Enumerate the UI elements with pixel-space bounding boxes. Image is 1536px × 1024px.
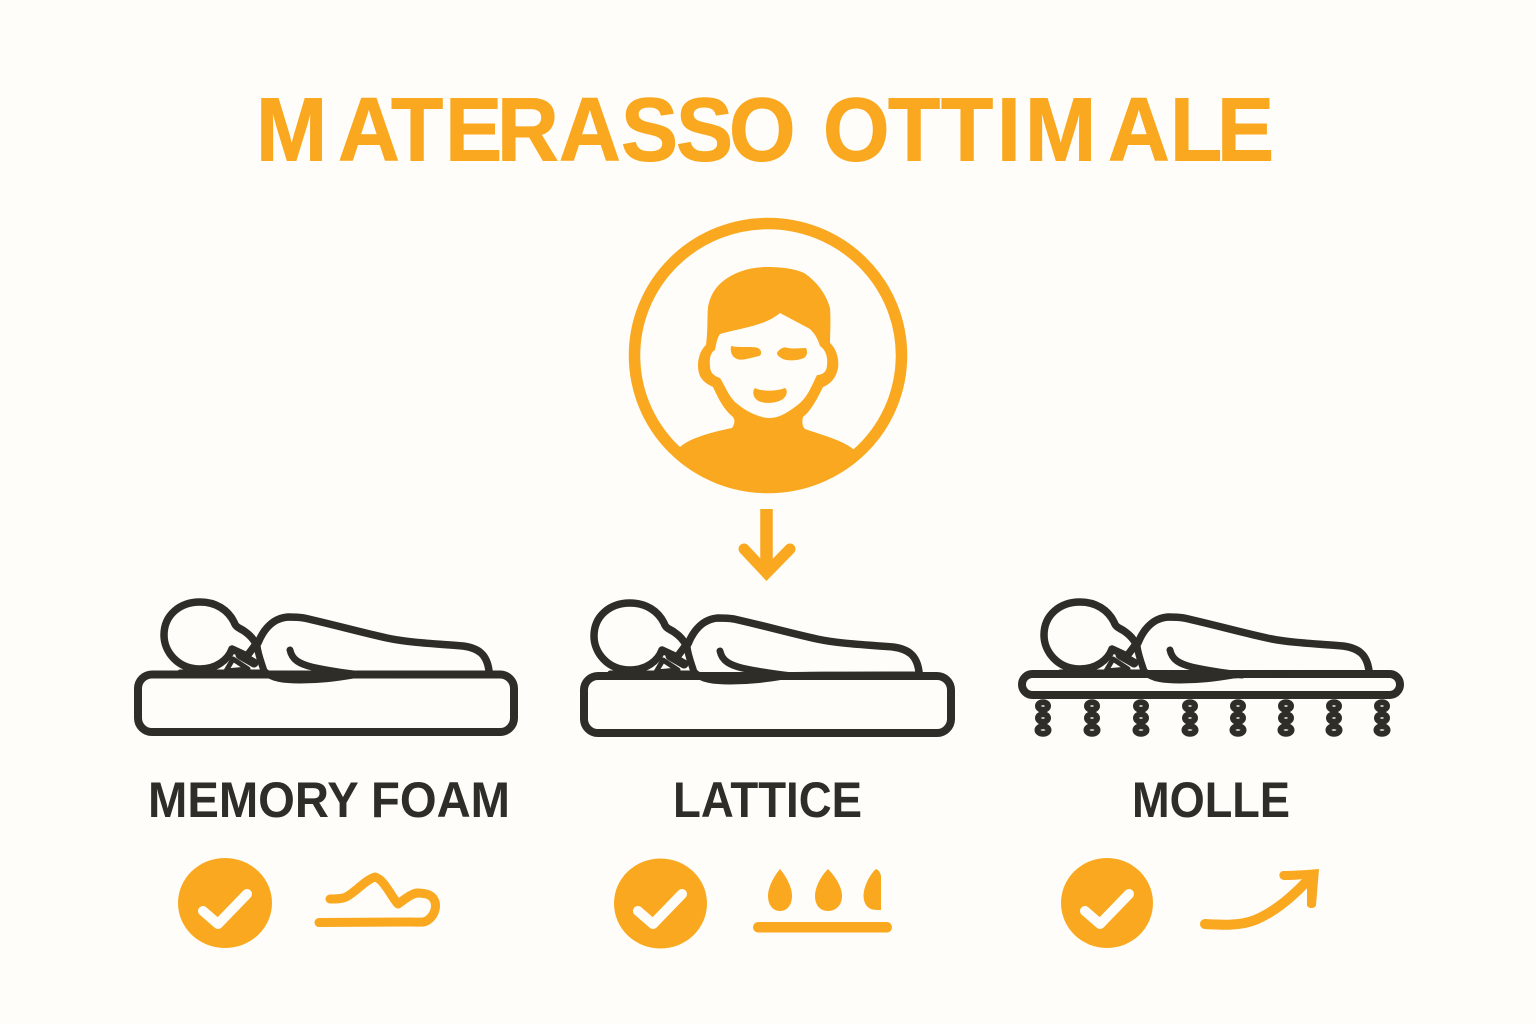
base bar xyxy=(753,922,892,932)
right eye xyxy=(777,347,807,360)
drop one xyxy=(768,869,792,911)
icon: check memory foam xyxy=(178,858,272,948)
sleeper xyxy=(1044,602,1370,680)
drop three xyxy=(864,869,881,910)
icon: contour wave xyxy=(319,877,435,922)
springs xyxy=(1038,702,1388,734)
sleeper xyxy=(164,602,490,680)
icon: check springs xyxy=(1061,858,1153,948)
drop two xyxy=(815,869,842,911)
arrow: down to mattresses xyxy=(744,509,790,573)
face xyxy=(710,313,827,418)
icon: check latex xyxy=(614,858,707,948)
left eye xyxy=(731,346,761,360)
label: lattice: LATTICE xyxy=(673,772,862,828)
mattress xyxy=(584,676,951,733)
label: memory foam: MEMORY FOAM xyxy=(148,772,510,828)
title: MATERASSO OTTIMALE xyxy=(256,80,1274,180)
panel: spring mattress illustration xyxy=(1022,602,1400,734)
sleeper xyxy=(594,603,920,681)
icon: sleeping person portrait xyxy=(634,224,902,492)
portrait ring xyxy=(634,224,902,488)
panel: memory foam mattress illustration xyxy=(138,602,514,732)
label: molle: MOLLE xyxy=(1132,772,1290,828)
mattress xyxy=(138,674,514,732)
icon: rising arrow xyxy=(1205,869,1319,925)
icon: drops and base xyxy=(753,869,892,932)
panel: latex mattress illustration xyxy=(584,603,951,733)
mattress xyxy=(1022,674,1400,695)
head and shoulders silhouette xyxy=(675,267,861,492)
mouth xyxy=(753,388,787,403)
